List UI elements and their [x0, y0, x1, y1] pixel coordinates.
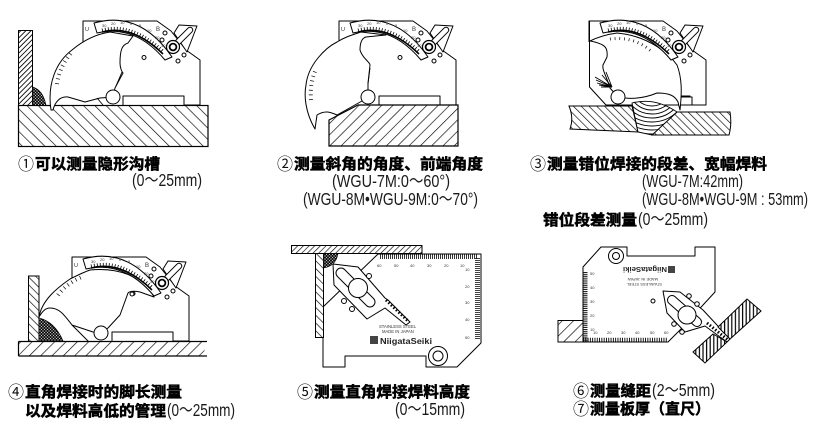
panel: gauge 6 gap and thickness: 40: [635, 330, 640, 335]
panel: gauge 5 fillet weld height: 10: [465, 267, 470, 272]
caption 6 and 7: ⑦: [573, 395, 589, 420]
caption 6 and 7: 测量板厚（直尺）: [590, 400, 710, 418]
panel: gauge 4 fillet leg length: [18, 256, 207, 356]
panel: gauge 6 gap and thickness: [558, 247, 761, 363]
scale band: [94, 20, 172, 60]
wall plate: [316, 254, 324, 338]
caption 1: ①: [18, 150, 34, 175]
upside-down logo: MADE IN JAPAN: [628, 277, 658, 282]
gauge plate: [83, 21, 200, 105]
product text: STAINLESS STEEL: [379, 324, 417, 329]
panel: gauge 6 gap and thickness: 10: [593, 330, 598, 335]
caption 2: [277, 150, 483, 209]
right ruler: [475, 258, 480, 340]
gauge plate: [589, 21, 706, 105]
base plate: [18, 342, 207, 356]
scale band: [600, 20, 678, 60]
caption 3: ③: [530, 150, 546, 175]
caption 2: 测量斜角的角度、前端角度: [294, 155, 483, 173]
panel: gauge 5 fillet weld height: 40: [410, 263, 415, 268]
panel: gauge 5 fillet weld height: NiigataSeiki: [380, 337, 432, 346]
panel: gauge 6 gap and thickness: 20: [590, 313, 595, 318]
weld bead: [39, 318, 63, 341]
bottom ruler: [583, 338, 667, 342]
scale band: [83, 256, 161, 296]
caption 6 and 7: [573, 377, 715, 420]
caption 4: 以及焊料高低的管理: [25, 402, 166, 420]
top ruler: [380, 254, 478, 259]
base plate: [18, 106, 208, 146]
panel: gauge 6 gap and thickness: 50: [650, 330, 655, 335]
panel: gauge 5 fillet weld height: 30: [465, 300, 470, 305]
ring: [608, 248, 624, 264]
caption 4: ④: [8, 378, 24, 403]
top plate: [292, 246, 422, 254]
panel: gauge 5 fillet weld height: [292, 246, 481, 367]
upside-down logo: STAINLESS STEEL: [626, 282, 662, 287]
caption 2: (WGU-7M:0〜60°): [332, 171, 450, 191]
panel: gauge 5 fillet weld height: 20: [444, 263, 449, 268]
caption 3: [530, 150, 808, 229]
gauge plate: [72, 257, 189, 341]
left block: [558, 320, 583, 342]
left ruler: [582, 272, 588, 342]
swing arm: [305, 32, 386, 129]
gauge L plate: [323, 254, 481, 367]
caption 6 and 7: 测量缝距: [590, 382, 651, 400]
caption 4: 直角焊接时的脚长测量: [25, 383, 182, 401]
weld bead: [32, 87, 46, 106]
left scale ticks: [57, 52, 72, 84]
panel: gauge 6 gap and thickness: 60: [664, 330, 669, 335]
panel: gauge 2 bevel angle: [305, 20, 458, 146]
weld layers: [632, 102, 676, 134]
caption 5: ⑤: [297, 378, 313, 403]
caption 2: (WGU-8M•WGU-9M:0〜70°): [303, 189, 478, 209]
panel: gauge 6 gap and thickness: 40: [590, 285, 595, 290]
panel: gauge 6 gap and thickness: 30: [621, 330, 626, 335]
fan gauge lines: [595, 72, 612, 87]
vertical plate: [18, 30, 32, 106]
upper steel plate: [718, 299, 761, 339]
caption 1: [18, 150, 202, 190]
lower steel plate: [693, 334, 727, 363]
panel: gauge 6 gap and thickness: 10: [590, 327, 595, 332]
panel: gauge 6 gap and thickness: 30: [590, 299, 595, 304]
swing arm: [663, 291, 730, 342]
upside-down logo: [623, 265, 667, 287]
gauge plate: [339, 21, 456, 105]
caption 1: (0〜25mm): [132, 170, 202, 190]
bevel workpiece: [329, 105, 458, 146]
panel: gauge 6 gap and thickness: 50: [590, 271, 595, 276]
caption 3: (0〜25mm): [638, 209, 708, 229]
caption 1: 可以测量隐形沟槽: [35, 155, 160, 173]
panel: gauge 3 misalignment and weld width: [569, 20, 731, 140]
caption 6 and 7: ⑥: [573, 377, 589, 402]
panel: gauge 5 fillet weld height: 10: [460, 263, 465, 268]
caption 5: [297, 378, 470, 419]
panel: gauge 5 fillet weld height: 60: [377, 263, 382, 268]
weld bead: [324, 254, 338, 268]
caption 3: 错位段差测量: [543, 211, 637, 229]
swing arm: [50, 32, 133, 110]
panel: gauge 5 fillet weld height: 30: [427, 263, 432, 268]
caption 2: ②: [277, 150, 293, 175]
caption 3: 测量错位焊接的段差、宽幅焊料: [547, 155, 767, 173]
panel: gauge 6 gap and thickness: 20: [607, 330, 612, 335]
gauge L plate: [583, 247, 715, 342]
caption 4: [8, 378, 235, 420]
swing arm: [39, 270, 154, 341]
caption 5: 测量直角焊接焊料高度: [314, 383, 470, 401]
panel: gauge 5 fillet weld height: 50: [394, 263, 399, 268]
right workpiece: [652, 112, 731, 135]
scale band: [350, 20, 428, 60]
vertical plate: [28, 276, 39, 342]
panel: gauge 5 fillet weld height: 20: [465, 284, 470, 289]
caption 5: (0〜15mm): [395, 399, 465, 419]
panel: gauge 5 fillet weld height: MADE IN JAPAN: [382, 329, 414, 334]
left workpiece: [569, 106, 638, 132]
panel: gauge 1 hidden groove: [18, 20, 208, 146]
upside-down logo: NiigataSeiki: [623, 265, 667, 274]
panel: gauge 5 fillet weld height: 40: [465, 317, 470, 322]
left scale ticks: [58, 277, 82, 295]
logo: [370, 336, 378, 344]
left scale ticks: [311, 69, 316, 100]
caption 3: (WGU-7M:42mm): [642, 171, 743, 191]
caption 6 and 7: (2〜5mm): [652, 380, 715, 400]
caption 4: (0〜25mm): [167, 400, 235, 420]
panel: gauge 5 fillet weld height: 50: [465, 335, 470, 340]
swing arm: [590, 33, 681, 110]
bottom ring: [428, 346, 448, 366]
swing arm: [333, 264, 410, 325]
